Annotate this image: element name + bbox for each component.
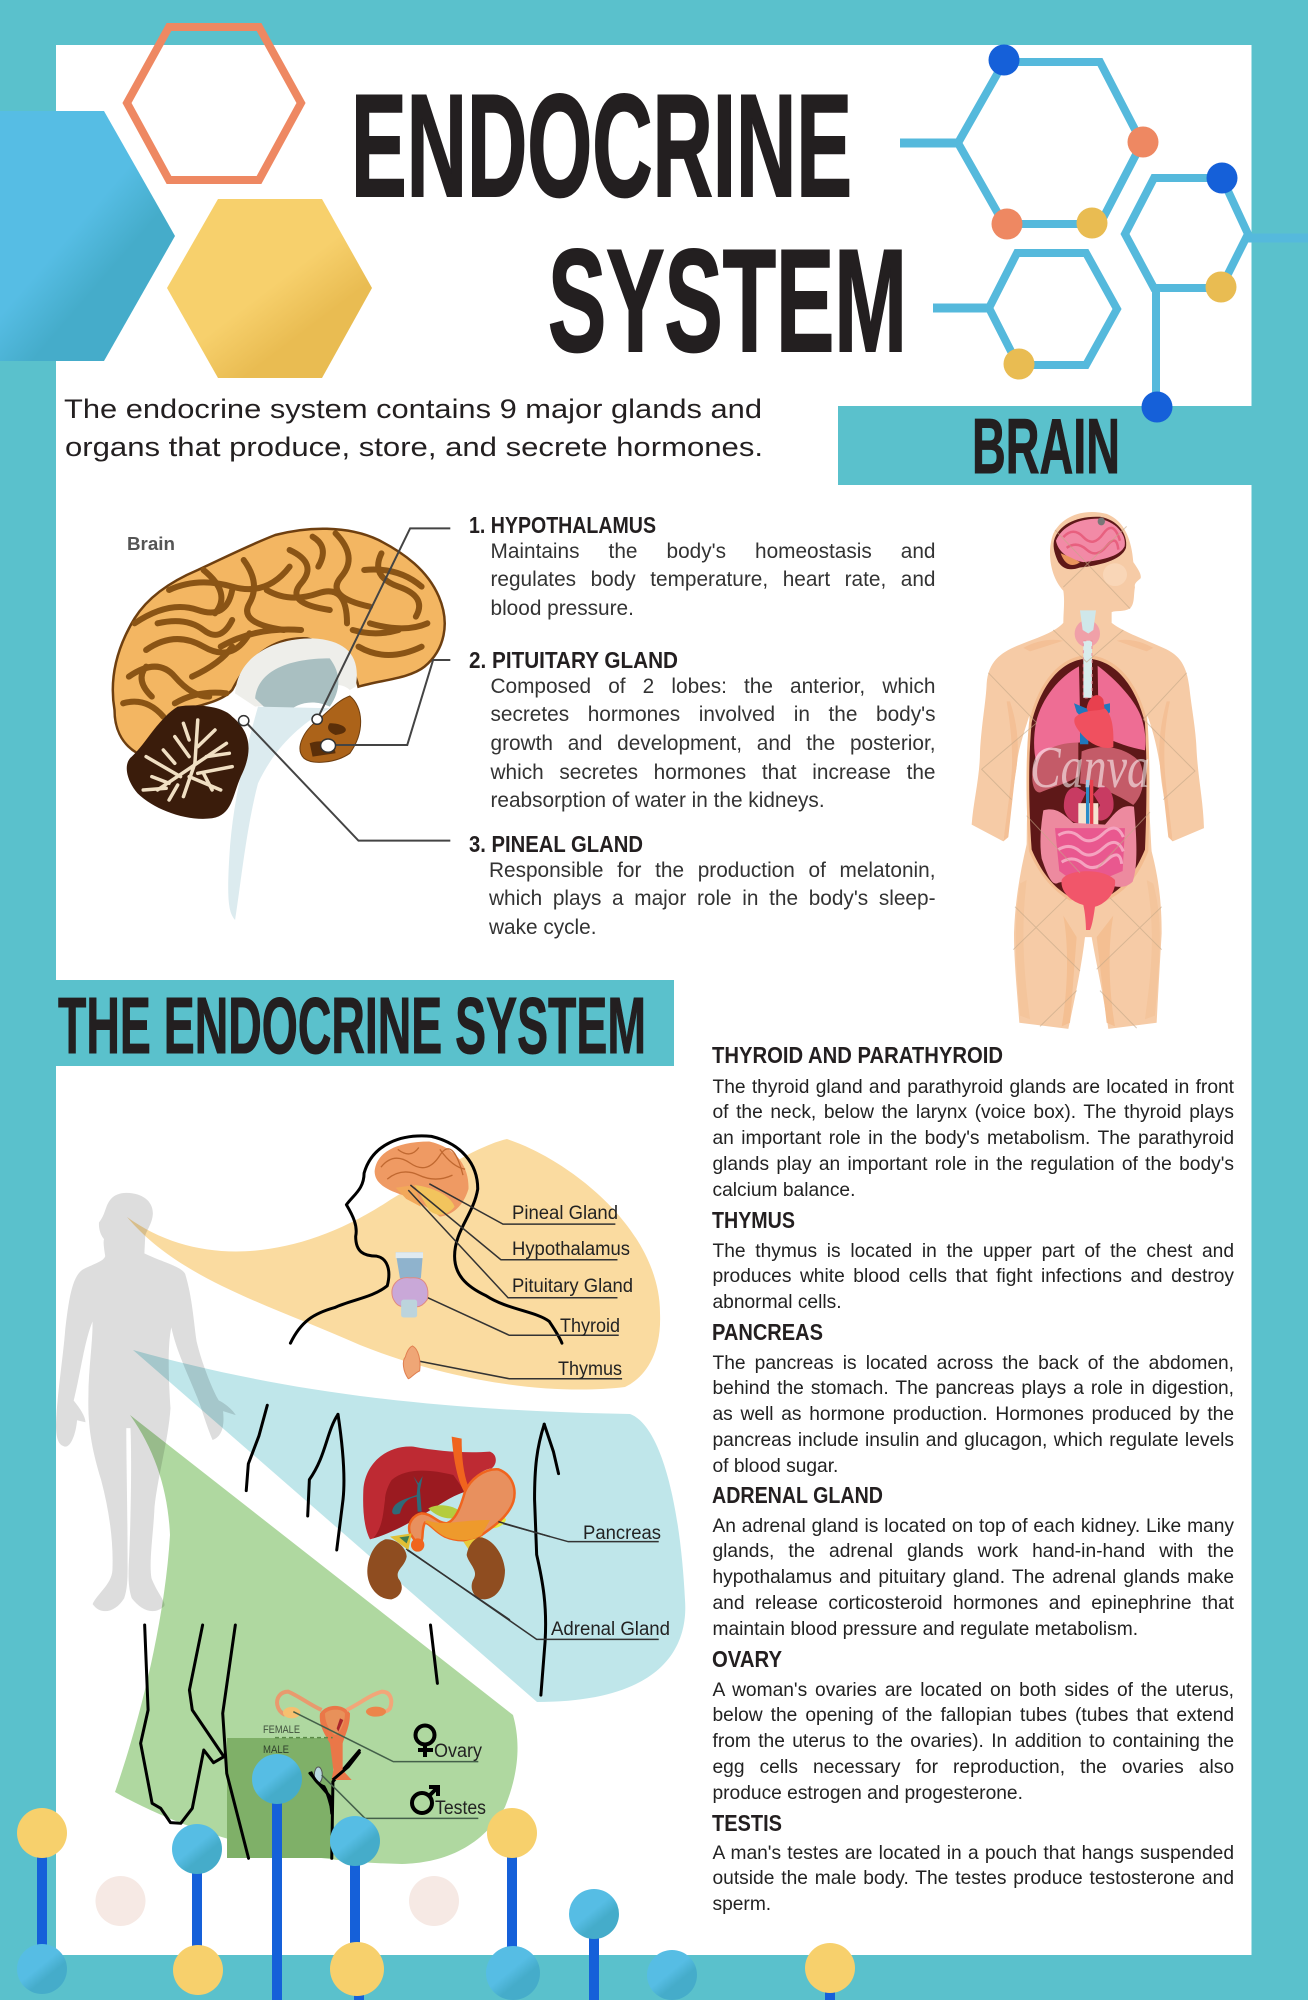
heading: testis: TESTIS xyxy=(712,1810,782,1836)
brain label: Brain xyxy=(127,534,175,554)
heading: pituitary gland: 2. PITUITARY GLAND xyxy=(469,647,678,673)
diagram labels: Thyroid xyxy=(560,1316,620,1337)
icon: yellow solid hexagon xyxy=(167,199,372,378)
endocrine system diagram xyxy=(56,1136,685,1864)
text: thyroid description: The thyroid gland and parathyroid glands are located in front xyxy=(712,1076,1234,1098)
panel: pelvis wedge xyxy=(115,1415,518,1864)
text: thyroid description xyxy=(712,1076,1234,1200)
stock watermark xyxy=(982,526,1195,1028)
text: thymus description: abnormal cells. xyxy=(712,1292,842,1313)
text: ovary description: egg cells necessary for reproduction, the ovaries also xyxy=(712,1757,1234,1778)
text: thyroid description: an important role in the body's metabolism. The parathyroid xyxy=(712,1128,1234,1149)
text: pancreas description: behind the stomach. The pancreas plays a role in digestion, xyxy=(712,1378,1234,1399)
text: pineal gland description: which plays a major role in the body's sleep- xyxy=(489,887,936,910)
icon: liver, stomach, kidneys, pancreas xyxy=(363,1437,550,1620)
text: pancreas description: pancreas include insulin and glucagon, which regulate levels xyxy=(712,1430,1234,1451)
text: hypothalamus description: regulates body temperature, heart rate, and xyxy=(490,568,936,591)
text: testis description: sperm. xyxy=(712,1894,771,1915)
diagram labels: Pancreas xyxy=(583,1523,661,1544)
diagram labels: FEMALE xyxy=(263,1724,300,1736)
intro text: The endocrine system contains 9 major glands and xyxy=(64,394,762,424)
heading: adrenal gland: ADRENAL GLAND xyxy=(712,1482,883,1508)
heading: ovary: OVARY xyxy=(712,1646,782,1672)
brain drawing xyxy=(113,528,450,920)
text: testis description: outside the male body. The testes produce testosterone and xyxy=(712,1868,1234,1889)
diagram labels: MALE xyxy=(263,1744,289,1756)
body cavity xyxy=(1029,659,1146,897)
diagram labels: Hypothalamus xyxy=(512,1239,630,1260)
pale circles xyxy=(96,1876,459,1926)
molecule diagram of hexagons xyxy=(900,44,1308,422)
heading panel: the endocrine system: THE ENDOCRINE SYSTEM xyxy=(58,981,646,1070)
body silhouette xyxy=(972,512,1204,1029)
text: pituitary gland description: reabsorption of water in the kidneys. xyxy=(490,789,825,812)
text: testis description xyxy=(712,1842,1234,1915)
section headings: brain glands xyxy=(469,512,678,857)
diagram labels: Pituitary Gland xyxy=(512,1276,633,1297)
liver xyxy=(1032,742,1143,805)
diagram labels xyxy=(263,1203,670,1819)
title xyxy=(351,64,907,382)
text: pancreas description xyxy=(712,1352,1234,1476)
text: ovary description: A woman's ovaries are located on both sides of the uterus, xyxy=(712,1680,1234,1700)
header decoration: hexagons xyxy=(0,27,372,378)
text: adrenal gland description: and release corticosteroid hormones and epinephrine that xyxy=(712,1593,1234,1614)
intro text xyxy=(64,394,763,462)
text: pituitary gland description: Composed of 2 lobes: the anterior, which xyxy=(490,674,936,698)
yellow nodes xyxy=(17,1808,855,1996)
text: thymus description xyxy=(712,1240,1234,1313)
male zone rectangle xyxy=(227,1738,333,1858)
text: adrenal gland description: glands, the adrenal glands work hand-in-hand with the xyxy=(712,1541,1234,1562)
diagram labels: Ovary xyxy=(434,1741,482,1762)
panel: abdomen wedge xyxy=(133,1350,685,1702)
lungs xyxy=(1034,666,1146,764)
text: pineal gland description xyxy=(489,858,936,939)
heading: pineal gland: 3. PINEAL GLAND xyxy=(469,831,643,857)
text: pineal gland description: wake cycle. xyxy=(489,916,596,939)
heading: pancreas: PANCREAS xyxy=(712,1319,823,1345)
text: ovary description: produce estrogen and progesterone. xyxy=(712,1782,1023,1804)
intestines xyxy=(1040,806,1136,887)
text: adrenal gland description: hypothalamus and pituitary gland. The adrenal glands make xyxy=(712,1567,1234,1588)
text: adrenal gland description: maintain blood pressure and regulate metabolism. xyxy=(712,1618,1138,1640)
brain in head xyxy=(1054,517,1126,569)
text: ovary description xyxy=(712,1680,1234,1804)
icon: thymus xyxy=(403,1346,420,1379)
human body organs illustration xyxy=(972,512,1204,1029)
text: thyroid description: calcium balance. xyxy=(712,1180,855,1200)
icon: grey human silhouette xyxy=(56,1193,236,1611)
text: hypothalamus description: blood pressure. xyxy=(490,597,634,620)
panel: head and neck wedge xyxy=(127,1139,660,1390)
blue nodes xyxy=(17,1754,697,2000)
icon: brain in head xyxy=(375,1142,469,1217)
title: ENDOCRINE xyxy=(351,64,852,227)
diagram labels: Testes xyxy=(435,1798,486,1819)
blue stick bars xyxy=(37,1779,835,2000)
text: pancreas description: of blood sugar. xyxy=(712,1456,838,1476)
heading panel: the endocrine system xyxy=(56,980,674,1070)
icon: male symbol xyxy=(412,1787,438,1813)
diagram labels: Pineal Gland xyxy=(512,1203,618,1224)
text: ovary description: below the opening of the fallopian tubes (tubes that extend xyxy=(712,1705,1234,1726)
text: hypothalamus description: Maintains the body's homeostasis and xyxy=(490,540,936,562)
molecule nodes xyxy=(988,44,1238,422)
text: thyroid description: glands play an important role in the regulation of the body's xyxy=(712,1154,1234,1175)
watermark text: Canva xyxy=(1030,735,1150,801)
right column headings xyxy=(712,1042,1003,1836)
text: adrenal gland description: An adrenal gland is located on top of each kidney. Like many xyxy=(712,1516,1234,1536)
icon: thyroid xyxy=(392,1252,428,1317)
heading panel: brain: BRAIN xyxy=(972,402,1120,490)
leader lines and labels: head xyxy=(406,1184,659,1639)
text: pituitary gland description: secretes hormones involved in the body's xyxy=(490,703,936,726)
text: hypothalamus description xyxy=(490,540,936,620)
heading panel: brain xyxy=(838,402,1252,490)
text: thymus description: The thymus is located in the upper part of the chest and xyxy=(712,1240,1234,1262)
molecule hexagon lines xyxy=(900,62,1308,407)
body outlines xyxy=(141,1136,562,1858)
trachea and thyroid xyxy=(1075,620,1100,647)
brain anatomy illustration xyxy=(113,528,450,920)
icon: blue solid hexagon xyxy=(0,111,175,361)
text: pituitary gland description: growth and development, and the posterior, xyxy=(490,732,936,755)
bladder xyxy=(1061,871,1115,930)
text: pituitary gland description xyxy=(490,674,936,812)
intro text: organs that produce, store, and secrete hormones. xyxy=(65,432,763,462)
text: pituitary gland description: which secretes hormones that increase the xyxy=(490,761,936,784)
decorative sticks and circles along the bottom xyxy=(17,1754,855,2000)
icon: orange outline hexagon xyxy=(127,27,301,180)
text: pancreas description: as well as hormone production. Hormones produced by the xyxy=(712,1404,1234,1425)
icon: female symbol xyxy=(416,1726,434,1757)
text: ovary description: from the uterus to the ovaries). In addition to containing the xyxy=(712,1731,1234,1752)
diagram labels: Thymus xyxy=(558,1359,622,1380)
face cheek xyxy=(1103,563,1127,586)
text: testis description: A man's testes are located in a pouch that hangs suspended xyxy=(712,1842,1234,1864)
text: adrenal gland description xyxy=(712,1516,1234,1640)
text: pancreas description: The pancreas is located across the back of the abdomen, xyxy=(712,1352,1234,1374)
title: SYSTEM xyxy=(548,219,907,382)
text: thyroid description: of the neck, below the larynx (voice box). The thyroid plays xyxy=(712,1102,1234,1123)
icon: reproductive organs xyxy=(275,1692,478,1818)
heart xyxy=(1074,703,1110,744)
kidneys and vessels xyxy=(1064,787,1086,823)
heading: thymus: THYMUS xyxy=(712,1207,795,1233)
heading: hypothalamus: 1. HYPOTHALAMUS xyxy=(469,512,656,538)
diagram labels: Adrenal Gland xyxy=(551,1619,670,1640)
text: thymus description: produces white blood cells that fight infections and destroy xyxy=(712,1266,1234,1287)
text: pineal gland description: Responsible for the production of melatonin, xyxy=(489,858,936,882)
heading: thyroid and parathyroid: THYROID AND PARATHYROID xyxy=(712,1042,1003,1068)
